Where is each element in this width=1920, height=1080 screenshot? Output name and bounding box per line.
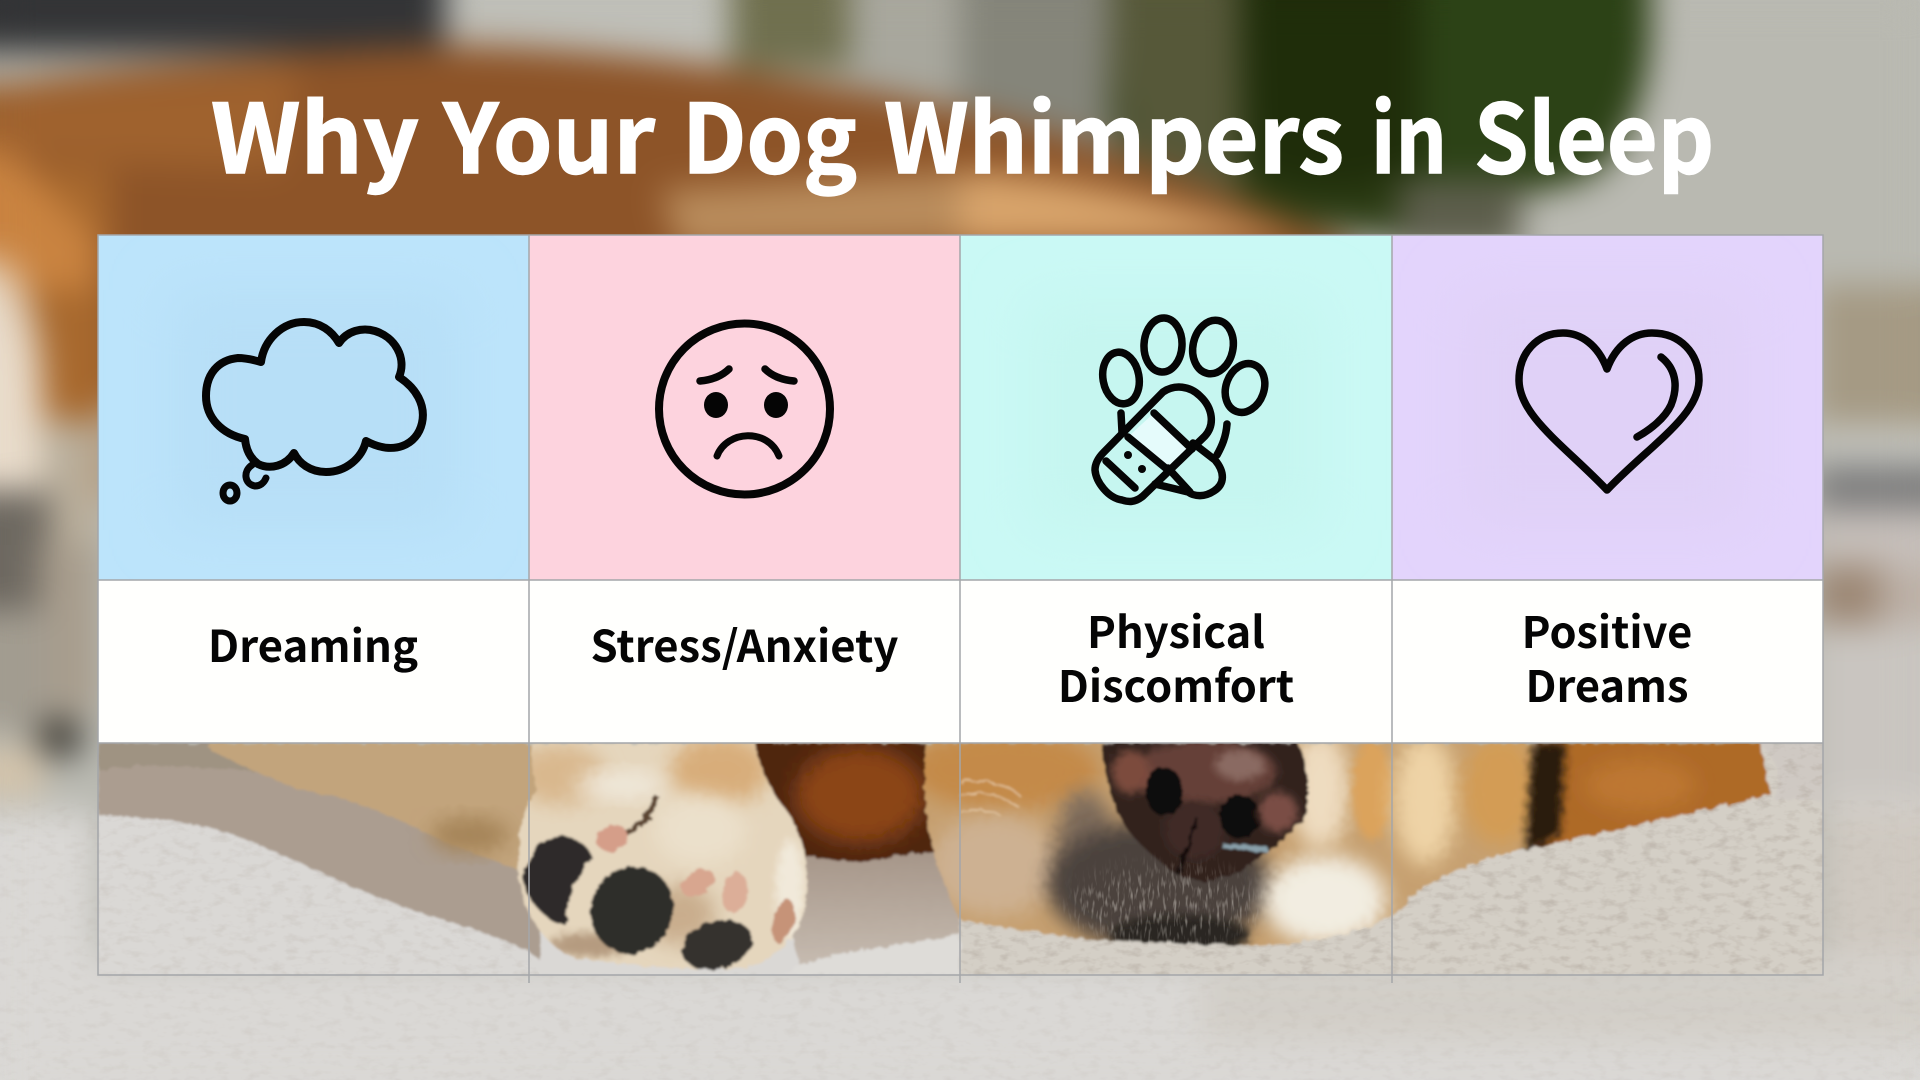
panel: physical discomfort (960, 235, 1392, 743)
title: Sleep (1474, 64, 1714, 201)
stress colour block (529, 235, 960, 580)
physical label box (960, 580, 1392, 743)
panel: positive dreams (1392, 235, 1823, 743)
icon: thought cloud (206, 322, 423, 501)
title: Dog (682, 64, 857, 201)
physical label: Discomfort (1058, 653, 1294, 715)
title: Why (211, 64, 419, 201)
title (211, 64, 1714, 201)
title: Your (442, 64, 656, 201)
stress label box (529, 580, 960, 743)
icon: bandaged paw (1095, 316, 1271, 501)
positive label: Positive (1522, 599, 1692, 661)
icon: heart (1519, 333, 1699, 490)
physical label: Physical (1087, 599, 1265, 661)
dreaming label: Dreaming (208, 611, 418, 675)
dreaming label box (98, 580, 529, 743)
title: in (1371, 64, 1447, 201)
panel: dreaming (98, 235, 529, 743)
icon: worried face (659, 324, 830, 494)
dreaming colour block (98, 235, 529, 580)
positive colour block (1392, 235, 1823, 580)
stress label: Stress/Anxiety (591, 611, 898, 675)
positive label box (1392, 580, 1823, 743)
positive label: Dreams (1526, 653, 1688, 715)
physical colour block (960, 235, 1392, 580)
panel: stress/anxiety (529, 235, 960, 743)
title: Whimpers (884, 64, 1344, 201)
